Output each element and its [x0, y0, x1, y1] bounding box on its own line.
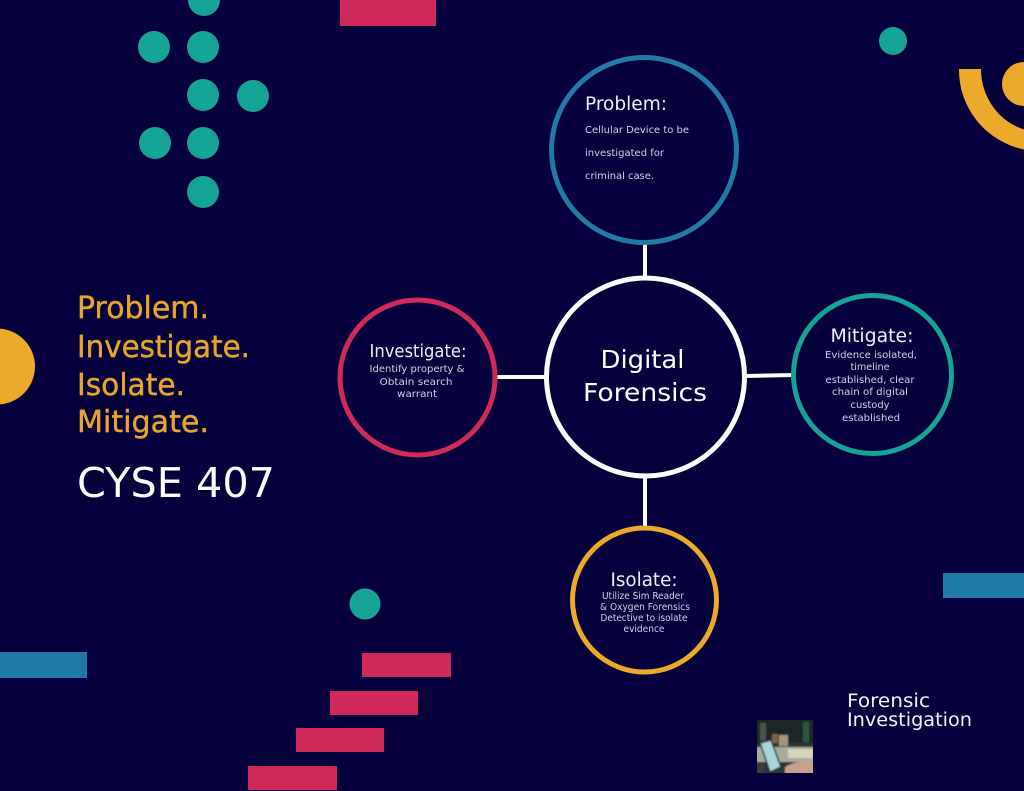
title: course code: CYSE 407 — [77, 459, 275, 507]
node: Mitigate: custody — [850, 400, 890, 411]
heading: process steps: Investigate. — [77, 330, 250, 365]
node: Digital Forensics hub — [546, 278, 744, 476]
bar: blue left edge — [0, 652, 87, 678]
node: Investigate: Obtain search — [380, 377, 452, 388]
node: Investigate: Identify property & — [370, 364, 465, 375]
dot: teal top right — [879, 27, 907, 55]
node: Investigate: Investigate: — [370, 342, 466, 362]
node: Isolate: Utilize Sim Reader — [602, 591, 684, 602]
node: Mitigate: established — [842, 413, 900, 424]
node: Mitigate: Evidence isolated, — [825, 350, 917, 361]
half circle: orange left edge — [0, 328, 35, 404]
node: Isolate: & Oxygen Forensics — [600, 602, 690, 613]
heading: process steps: Problem. — [77, 291, 209, 326]
heading: process steps: Mitigate. — [77, 405, 209, 440]
thumbnail: person using phone at table — [757, 720, 813, 773]
dot: teal bottom centre — [350, 588, 380, 620]
connectors: hub spokes — [495, 240, 794, 530]
node: Problem: Problem: — [585, 94, 667, 115]
node: Investigate: warrant — [397, 389, 437, 400]
bar: blue right edge — [943, 573, 1024, 598]
caption: Forensic Investigation: Forensic — [847, 691, 930, 712]
node: Isolate: evidence — [624, 624, 665, 635]
dot cluster: teal dots top left — [138, 0, 269, 208]
caption: Forensic Investigation: Investigation — [847, 710, 972, 731]
node: Investigate — [340, 300, 495, 455]
node: Problem: investigated for — [585, 148, 664, 159]
node: Mitigate: established, clear — [826, 375, 915, 386]
heading: process steps — [77, 291, 250, 440]
node: Problem — [552, 58, 736, 242]
node: Problem: Cellular Device to be — [585, 125, 689, 136]
icon: orange arc and dot top right — [959, 62, 1024, 150]
node: Mitigate: timeline — [850, 362, 890, 373]
caption: Forensic Investigation — [847, 691, 972, 731]
node: Digital Forensics hub: Forensics — [583, 378, 707, 407]
node: Problem: criminal case. — [585, 171, 654, 182]
node: Isolate: Detective to isolate — [600, 613, 688, 624]
node: Mitigate: chain of digital — [832, 387, 908, 398]
node: Isolate: Isolate: — [610, 570, 678, 591]
node: Mitigate: Mitigate: — [830, 326, 914, 347]
node: Mitigate — [794, 296, 952, 454]
staircase: crimson bars — [248, 653, 451, 790]
bar: top crimson — [340, 0, 436, 26]
node: Digital Forensics hub: Digital — [600, 345, 684, 374]
heading: process steps: Isolate. — [77, 368, 185, 403]
node: Isolate — [572, 528, 716, 672]
